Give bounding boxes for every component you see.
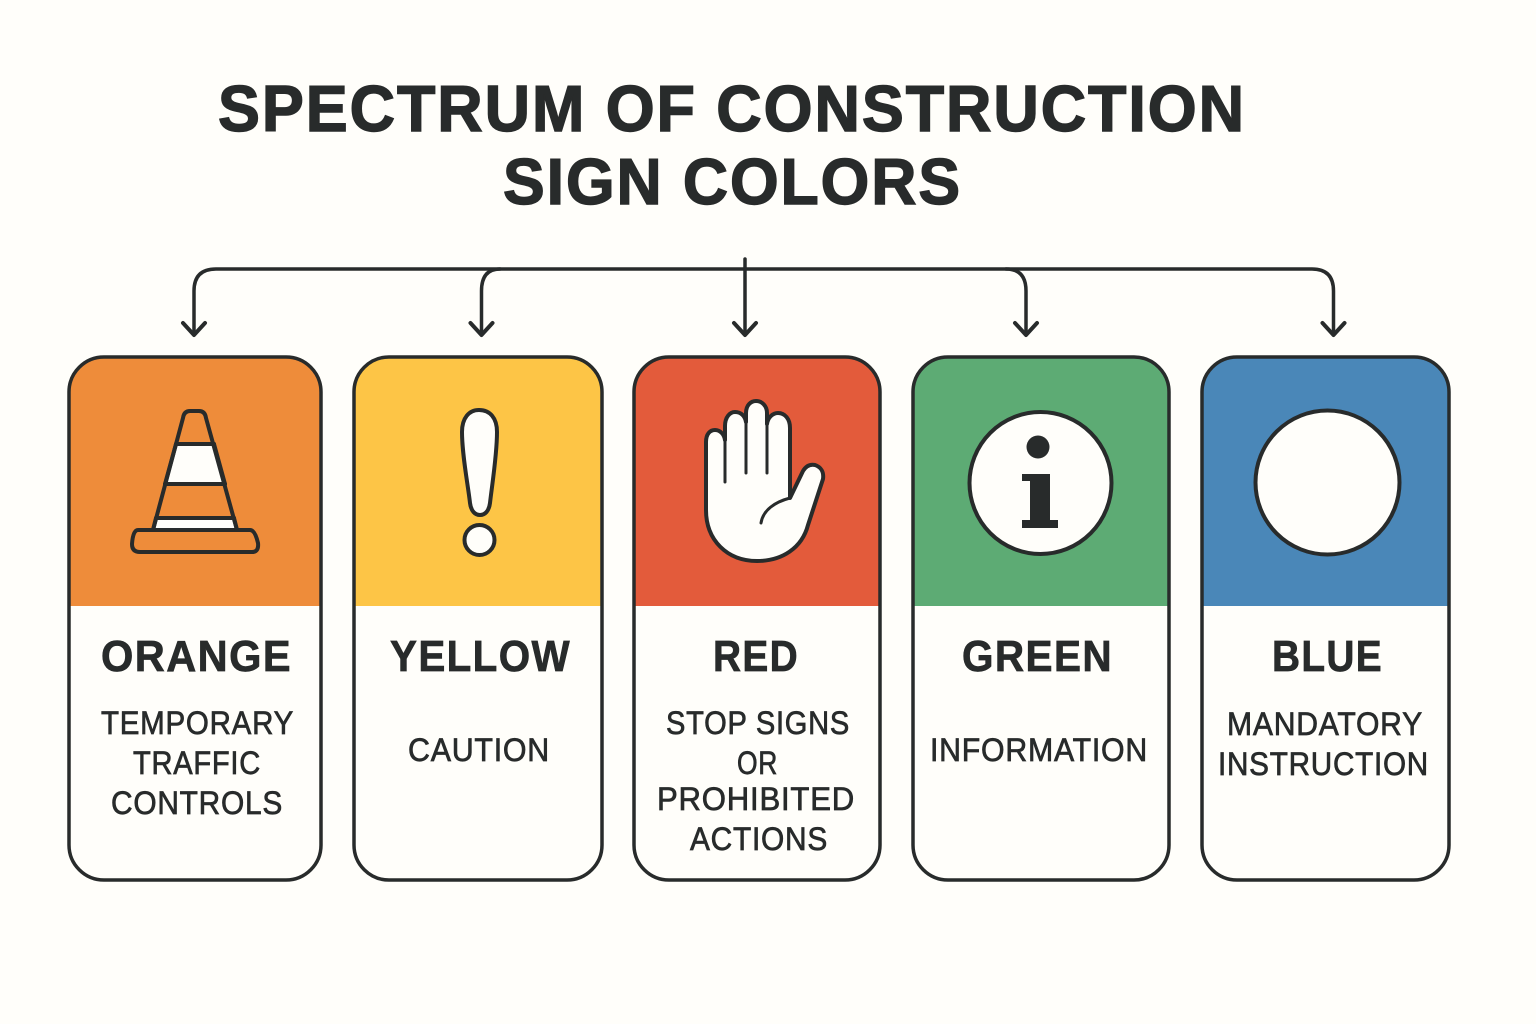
panel: yellow: [354, 357, 602, 880]
description: blue: INSTRUCTION: [1218, 746, 1429, 782]
description: yellow: CAUTION: [408, 732, 550, 768]
icon: information: [970, 412, 1112, 554]
description: orange: TEMPORARY: [101, 705, 294, 741]
description: orange: [101, 705, 294, 821]
description: red: PROHIBITED: [657, 781, 855, 817]
panel: orange: [69, 357, 321, 880]
card outline: orange: [69, 357, 321, 880]
card outline: yellow: [354, 357, 602, 880]
card outline: red: [634, 357, 880, 880]
icon: traffic cone: [132, 411, 258, 552]
description: blue: [1218, 706, 1429, 782]
heading: orange: ORANGE: [101, 632, 292, 681]
description: red: [657, 705, 855, 857]
heading: blue: BLUE: [1272, 632, 1383, 681]
title: SIGN COLORS: [503, 145, 962, 218]
title: [218, 72, 1246, 218]
heading: green: GREEN: [962, 632, 1113, 681]
icon: blank mandatory circle: [1256, 410, 1400, 554]
description: orange: TRAFFIC: [133, 745, 261, 781]
heading: yellow: YELLOW: [390, 632, 571, 681]
card outline: green: [913, 357, 1169, 880]
description: red: ACTIONS: [690, 821, 828, 857]
arrows: connector tree: [183, 259, 1344, 335]
panel: red: [634, 357, 880, 880]
panel: blue: [1202, 357, 1449, 880]
heading: red: RED: [713, 632, 799, 681]
description: blue: MANDATORY: [1227, 706, 1423, 742]
description: orange: CONTROLS: [111, 785, 283, 821]
description: red: OR: [737, 745, 778, 781]
icon: stop hand: [706, 401, 823, 561]
title: SPECTRUM OF CONSTRUCTION: [218, 72, 1246, 145]
description: red: STOP SIGNS: [666, 705, 850, 741]
description: green: INFORMATION: [930, 732, 1148, 768]
card outline: blue: [1202, 357, 1449, 880]
icon: exclamation mark: [462, 410, 497, 555]
panel: green: [913, 357, 1169, 880]
